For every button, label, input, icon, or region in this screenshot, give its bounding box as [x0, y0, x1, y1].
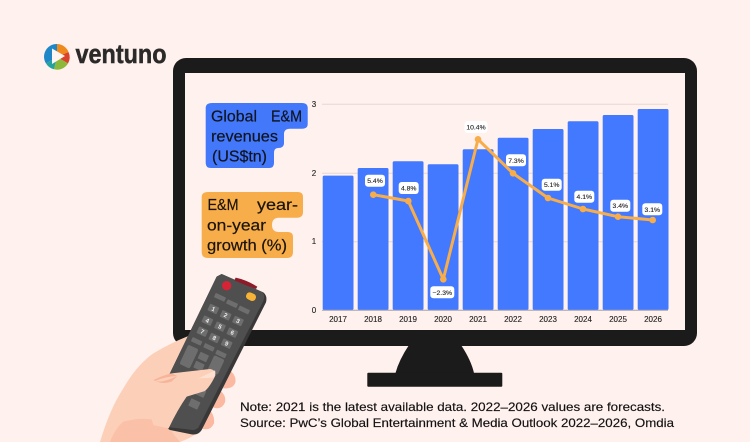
- remote body: 6: [229, 330, 235, 337]
- x axis year labels: 2025: [609, 315, 627, 324]
- growth line: [370, 136, 656, 283]
- growth value labels: 4.8%: [401, 186, 416, 192]
- growth value labels: 10.4%: [466, 124, 486, 132]
- legend: E&M year-on-year growth: year-: [257, 197, 298, 214]
- growth value labels: 4.1%: [577, 194, 592, 201]
- remote body: 7: [199, 329, 205, 336]
- legend: global E&M revenues: (US$tn): [212, 149, 267, 166]
- monitor stand: [367, 345, 502, 387]
- note and source: Source: PwC’s Global Entertainment & Media Outlook 2022–2026, Omdia: [240, 416, 674, 430]
- legend: global E&M revenues: revenues: [211, 129, 278, 146]
- growth value labels: 5.1%: [544, 182, 559, 189]
- remote body: [167, 274, 266, 434]
- y axis labels: 0: [312, 306, 317, 315]
- x axis year labels: 2018: [364, 315, 382, 324]
- monitor frame and screen: [173, 58, 697, 346]
- legend: global E&M revenues: [206, 103, 308, 168]
- logo: ventuno: ventuno: [76, 39, 166, 69]
- y axis labels: 2: [312, 169, 317, 178]
- note and source: Note: 2021 is the latest available data. 2022–2026 values are forecasts.: [240, 400, 665, 414]
- x axis year labels: 2023: [539, 315, 557, 324]
- y axis labels: 1: [312, 237, 317, 246]
- remote body: 2: [222, 313, 229, 320]
- remote body: 5: [217, 324, 223, 331]
- legend: E&M year-on-year growth: E&M: [208, 197, 238, 214]
- remote body: 3: [235, 318, 241, 326]
- growth value labels: 7.3%: [508, 158, 524, 165]
- legend: E&M year-on-year growth: growth (%): [207, 238, 287, 255]
- remote body: 9: [223, 341, 230, 348]
- note and source: [240, 400, 674, 430]
- x axis year labels: 2020: [434, 315, 452, 324]
- x axis year labels: [329, 315, 662, 324]
- x axis year labels: 2019: [399, 315, 417, 324]
- legend: global E&M revenues: E&M: [271, 109, 302, 126]
- remote keys: [179, 293, 250, 410]
- illustration: hand holding remote: [100, 274, 266, 442]
- growth value labels: [365, 121, 662, 298]
- remote body: 1: [210, 306, 216, 314]
- thumb and palm: [149, 369, 215, 428]
- growth value labels: 3.4%: [613, 203, 628, 210]
- remote body: 4: [204, 318, 210, 325]
- legend: E&M year-on-year growth: [202, 192, 303, 258]
- x axis year labels: 2026: [644, 315, 662, 324]
- x axis year labels: 2021: [469, 315, 487, 324]
- remote body: 8: [211, 335, 217, 343]
- growth value labels: 3.1%: [645, 207, 660, 214]
- x axis year labels: 2022: [504, 315, 522, 324]
- chart: revenues and growth: [312, 100, 668, 324]
- hand and arm behind remote: [100, 336, 236, 442]
- x axis year labels: 2017: [329, 315, 347, 324]
- x axis year labels: 2024: [574, 315, 592, 324]
- growth value labels: −2.3%: [433, 290, 452, 297]
- revenue bars: [323, 109, 668, 310]
- legend: global E&M revenues: Global: [211, 109, 257, 126]
- y axis labels: 3: [312, 100, 317, 109]
- growth value labels: 5.4%: [367, 178, 383, 185]
- legend: E&M year-on-year growth: on-year: [207, 218, 266, 235]
- y axis labels: [312, 100, 317, 315]
- logo: ventuno: [44, 39, 166, 70]
